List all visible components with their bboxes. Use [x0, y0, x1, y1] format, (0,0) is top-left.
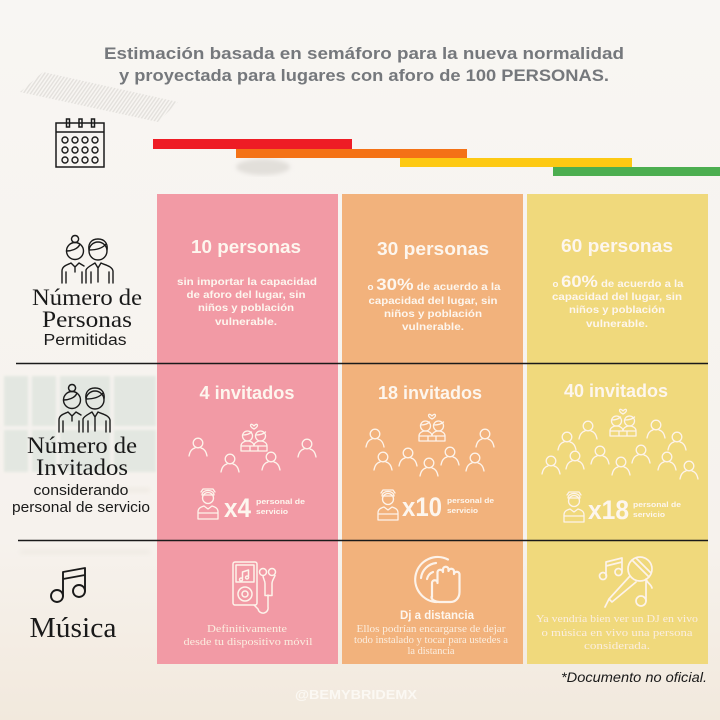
- DJ description: todo instalado y tocar para ustedes a: [354, 635, 508, 646]
- icon: music notes: [51, 568, 85, 602]
- 40 invitados: 40 invitados: [564, 381, 668, 401]
- yellow column description: [552, 272, 684, 330]
- 10 personas: 10 personas: [191, 237, 301, 257]
- orange column description: o 30% de acuerdo a la: [368, 275, 501, 294]
- guest icons: [366, 414, 494, 476]
- row label: número de invitados: personal de servicio: [12, 500, 150, 516]
- red column description: de aforo del lugar, sin: [186, 289, 306, 301]
- service staff x4: servicio: [256, 507, 288, 516]
- Dj a distancia: Dj a distancia: [400, 608, 474, 622]
- title: Estimación basada en semáforo para la nueva normalidad: [104, 44, 624, 63]
- row label: número de invitados: considerando: [34, 483, 128, 499]
- DJ description: [354, 624, 508, 657]
- handle: @BEMYBRIDEMX: [295, 687, 417, 702]
- icon: microphone and notes: [600, 557, 652, 607]
- service staff x10: servicio: [447, 506, 478, 515]
- yellow column description: niños y población: [569, 304, 665, 316]
- yellow column description: o 60% de acuerdo a la: [552, 272, 684, 291]
- red column description: sin importar la capacidad: [177, 276, 317, 288]
- service staff x4: [198, 489, 305, 523]
- service staff x18: [564, 492, 681, 525]
- row label: número de personas: Permitidas: [44, 332, 127, 349]
- red column description: vulnerable.: [215, 316, 277, 328]
- traffic light timeline bars: [153, 139, 720, 176]
- red column description: [177, 276, 317, 328]
- music description: [184, 624, 313, 648]
- panel: yellow column: [527, 194, 708, 664]
- guest icons: [189, 424, 316, 472]
- icon: couple outline: [62, 236, 113, 283]
- music description: o música en vivo una persona: [542, 628, 693, 639]
- icon: hand on vinyl: [415, 557, 460, 602]
- service staff x10: [378, 490, 494, 522]
- panel: orange column: [342, 194, 523, 664]
- music description: Definitivamente: [207, 624, 287, 635]
- 4 invitados: 4 invitados: [200, 383, 294, 403]
- ceiling vent: [20, 72, 178, 122]
- row label: número de personas: Personas: [42, 307, 132, 332]
- 60 personas: 60 personas: [561, 236, 673, 256]
- music description: Ya vendría bien ver un DJ en vivo: [536, 614, 698, 625]
- orange column description: [368, 275, 501, 333]
- icon: calendar: [56, 119, 104, 167]
- orange column description: niños y población: [384, 308, 482, 320]
- 30 personas: 30 personas: [377, 239, 489, 259]
- service staff x18: personal de: [633, 500, 681, 509]
- orange column description: vulnerable.: [402, 321, 464, 333]
- service staff x10: x10: [402, 492, 442, 522]
- row dividers: [16, 364, 708, 540]
- orange column description: capacidad del lugar, sin: [368, 295, 498, 307]
- row label: música: [30, 568, 117, 644]
- title: [104, 44, 624, 85]
- service staff x4: x4: [224, 493, 251, 523]
- row label: música: Música: [30, 613, 117, 644]
- service staff x10: personal de: [447, 496, 494, 505]
- yellow column description: capacidad del lugar, sin: [552, 291, 682, 303]
- 18 invitados: 18 invitados: [378, 383, 482, 403]
- service staff x18: servicio: [633, 510, 665, 519]
- row label: número de invitados: Número de: [27, 433, 137, 458]
- row label: número de personas: Número de: [32, 285, 142, 310]
- icon: music player: [233, 562, 276, 613]
- footnote: *Documento no oficial.: [561, 669, 707, 685]
- row label: número de invitados: [12, 385, 150, 516]
- icon: couple outline: [59, 385, 110, 432]
- row label: número de invitados: Invitados: [36, 455, 128, 480]
- yellow column description: vulnerable.: [586, 318, 648, 330]
- DJ description: Ellos podrían encargarse de dejar: [356, 624, 506, 635]
- red column description: niños y población: [198, 302, 294, 314]
- row label: número de personas: [32, 236, 142, 349]
- guest icons: [542, 409, 698, 479]
- service staff x18: x18: [588, 495, 629, 525]
- music description: considerada.: [584, 641, 650, 652]
- music description: [536, 614, 698, 652]
- DJ description: la distancia: [408, 646, 455, 657]
- service staff x4: personal de: [256, 497, 305, 506]
- title: y proyectada para lugares con aforo de 100 PERSONAS.: [119, 66, 609, 85]
- music description: desde tu dispositivo móvil: [184, 637, 313, 648]
- panel: red column: [157, 194, 338, 664]
